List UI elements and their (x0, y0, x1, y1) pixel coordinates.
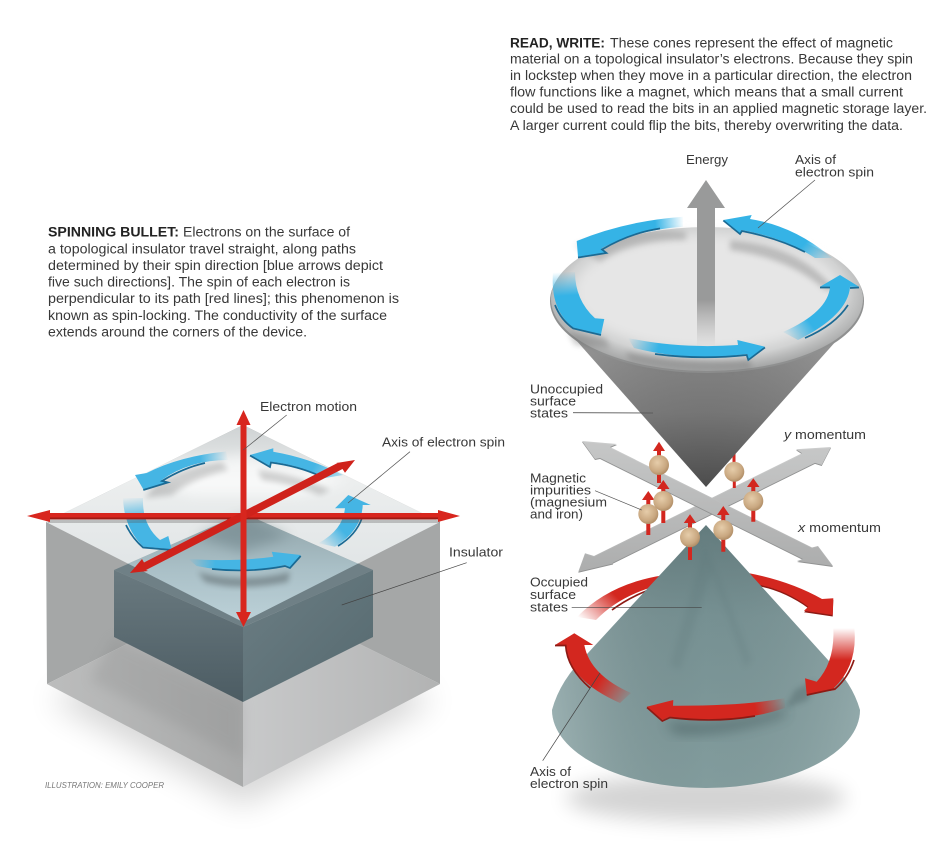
red arrow front right (805, 628, 855, 695)
red electron motion axes (27, 410, 460, 627)
heading and text: read, write: flow functions like a magnet, which means that a small current (510, 85, 903, 100)
heading and text: read, write: These cones represent the effect of magnetic (610, 35, 893, 50)
label: magnetic impurities: Magnetic (530, 471, 587, 486)
label: axis of electron spin (cube): Axis of electron spin (382, 435, 505, 450)
heading and text: spinning bullet: Electrons on the surface of (183, 225, 350, 240)
label: axis of electron spin (upper cone): electron spin (795, 164, 874, 180)
blue arrow 3 (318, 495, 371, 547)
label: axis of electron spin (upper cone): Axis of (795, 152, 836, 167)
heading and text: read, write: material on a topological insulator’s electrons. Because they spin (510, 52, 913, 66)
red arrows behind cone (577, 573, 833, 620)
cone blue arrow 1 (577, 217, 683, 258)
label: occupied surface states: Occupied (530, 575, 588, 590)
red arrow left (555, 633, 631, 703)
panel: insulator cube diagram (27, 410, 460, 805)
vertical axis (236, 410, 251, 627)
horizontal axis (27, 510, 460, 522)
label: axis of electron spin (cube) (348, 435, 505, 503)
heading and text: spinning bullet: extends around the corners of the device. (48, 325, 307, 340)
heading and text: read, write: A larger current could flip the bits, thereby overwriting the data. (510, 118, 903, 133)
label: axis of electron spin (lower cone): electron spin (530, 776, 608, 791)
heading and text: spinning bullet: determined by their spin direction [blue arrows depict (48, 258, 383, 273)
cube floor, front left (47, 586, 243, 787)
gray momentum arrows (578, 441, 833, 573)
heading and text: read, write: could be used to read the bits in an applied magnetic storage layer. (510, 101, 927, 116)
panel: lower cone (occupied surface states) (552, 525, 860, 822)
heading and text: spinning bullet: a topological insulator travel straight, along paths (48, 241, 356, 256)
heading and text: spinning bullet: SPINNING BULLET: (48, 225, 179, 240)
translucent top surface (46, 425, 440, 564)
label: magnetic impurities: and iron) (530, 507, 583, 522)
blue arrow 1 (135, 452, 228, 490)
cone blue arrow 5 (553, 272, 604, 335)
blue arrow 4 (188, 552, 301, 570)
label: electron motion: Electron motion (260, 399, 357, 414)
blue arrows on cone (553, 215, 859, 360)
label: magnetic impurities: impurities (530, 483, 592, 498)
heading and text: read, write: READ, WRITE: (510, 35, 605, 50)
label: unoccupied surface states: Unoccupied (530, 381, 603, 396)
label: axis of electron spin (upper cone) (758, 152, 874, 228)
blue arrow 5 (123, 498, 172, 550)
label: occupied surface states: surface (530, 587, 576, 602)
label: x momentum: x momentum (797, 520, 881, 535)
heading and text: spinning bullet: five such directions]. The spin of each electron is (48, 275, 350, 290)
magnetic impurity balls (638, 455, 763, 547)
label: unoccupied surface states: surface (530, 393, 576, 408)
label: magnetic impurities: (magnesium (530, 495, 607, 510)
label: unoccupied surface states (530, 381, 653, 420)
label: axis of electron spin (lower cone): Axis of (530, 764, 571, 779)
label: energy: Energy (686, 152, 728, 167)
blue spin arrows (123, 448, 371, 587)
label: axis of electron spin (lower cone) (530, 673, 608, 791)
blue arrow 2 (250, 448, 343, 478)
label: unoccupied surface states: states (530, 405, 569, 420)
cone blue arrow 2 (723, 215, 832, 258)
heading and text: spinning bullet (48, 225, 399, 340)
energy axis arrow (687, 180, 725, 348)
cone top disc (550, 227, 864, 373)
cone body (560, 322, 853, 487)
label: y momentum: y momentum (783, 427, 866, 442)
label: occupied surface states: states (530, 599, 569, 614)
back walls of cube (46, 425, 440, 684)
heading and text: spinning bullet: perpendicular to its path [red lines]; this phenomenon is (48, 291, 399, 306)
red spin arrows on impurities (642, 442, 760, 560)
panel: upper cone (unoccupied surface states) (550, 180, 864, 487)
cube floor, front right (243, 586, 440, 787)
label: insulator (342, 545, 504, 605)
cone blue arrow 3 (783, 275, 859, 340)
label: occupied surface states (530, 575, 702, 614)
cone blue arrow 4 (628, 338, 765, 360)
cone body (552, 525, 860, 788)
label: magnetic impurities (530, 471, 642, 522)
label: electron motion (243, 399, 357, 450)
label: insulator: Insulator (449, 545, 504, 560)
heading and text: read, write: in lockstep when they move in a particular direction, the electron (510, 68, 912, 83)
heading and text: read, write (510, 35, 927, 133)
illustration credit: ILLUSTRATION: EMILY COOPER (45, 780, 164, 790)
heading and text: spinning bullet: known as spin-locking. The conductivity of the surface (48, 308, 387, 323)
diagonal axis (130, 460, 355, 573)
inner insulator block (114, 513, 373, 702)
red arrow front (647, 698, 785, 721)
